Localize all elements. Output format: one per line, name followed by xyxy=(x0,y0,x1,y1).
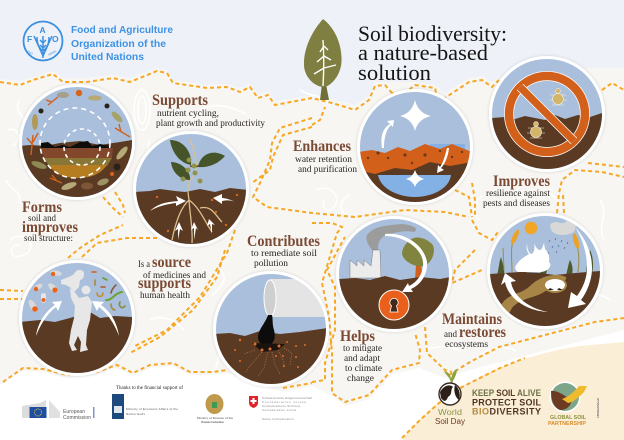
label: source xyxy=(138,254,206,301)
logo: Swiss confederation: Swiss Confederation xyxy=(262,417,294,421)
label: improves: Improves xyxy=(493,173,550,190)
title xyxy=(358,21,507,85)
label: enhances: and purification xyxy=(298,164,357,175)
logo: European Commission: Commission xyxy=(63,415,91,421)
label: forms: soil and xyxy=(28,214,56,224)
logo: Russian ministry xyxy=(197,394,233,424)
FAO logo xyxy=(24,22,62,60)
slogan xyxy=(472,388,542,416)
FAO logo: FIAT xyxy=(26,49,34,56)
logo: Global Soil Partnership: PARTNERSHIP xyxy=(548,421,587,427)
pipe xyxy=(270,279,330,317)
label: source: Is a xyxy=(138,260,151,270)
slogan: PROTECT SOIL xyxy=(472,398,542,408)
FAO name: United Nations xyxy=(71,51,144,63)
slogan: KEEP SOIL ALIVE xyxy=(472,388,541,398)
decorative swirls xyxy=(6,90,610,388)
label: contributes: pollution xyxy=(254,259,288,269)
logo: Swiss confederation xyxy=(249,396,312,421)
background: beige corner xyxy=(402,342,624,440)
slogan: BIODIVERSITY xyxy=(472,406,541,416)
logo: Swiss confederation: Confederaziun svizra xyxy=(262,408,296,412)
label: helps: to climate xyxy=(345,364,382,374)
cycle arrow xyxy=(385,234,427,292)
label: source: source xyxy=(152,254,191,271)
FAO letters: O xyxy=(52,34,59,44)
panel: enhances water xyxy=(357,89,473,205)
worms xyxy=(92,272,125,310)
label: contributes xyxy=(247,233,320,269)
sponsors heading: Thanks to the financial support of xyxy=(116,384,183,391)
human silhouette xyxy=(61,270,92,352)
label: enhances: water retention xyxy=(295,155,352,165)
plant xyxy=(172,139,222,243)
FAO name xyxy=(71,24,173,63)
label: helps: to mitigate xyxy=(343,344,382,354)
smoke xyxy=(366,224,416,250)
panel: helps climate change xyxy=(336,216,452,332)
tree xyxy=(415,266,422,278)
label: improves xyxy=(483,173,550,209)
label: supports: plant growth and productivity xyxy=(156,119,265,129)
arrows xyxy=(381,120,394,148)
label: maintains: Maintains xyxy=(442,311,502,328)
logo: Global Soil Partnership xyxy=(548,382,587,427)
logo: World Soil Day: World xyxy=(438,408,462,417)
FAO letters xyxy=(27,25,59,44)
arrows xyxy=(36,301,62,336)
label: improves: resilience against xyxy=(486,189,550,199)
leaves ring xyxy=(30,90,129,192)
label: helps: and adapt xyxy=(344,354,380,364)
panel: source of medicines xyxy=(19,260,135,376)
logo: Global Soil Partnership: GLOBAL SOIL xyxy=(550,415,586,421)
plants xyxy=(497,250,593,275)
cycle arrows xyxy=(501,273,548,312)
label: enhances xyxy=(293,138,357,175)
label: maintains xyxy=(442,311,506,350)
label: enhances: Enhances xyxy=(293,138,351,155)
label: maintains: ecosystems xyxy=(445,340,488,350)
FAO letters: A xyxy=(40,25,46,35)
print code: CB3611EN/1/12.20 xyxy=(596,398,600,418)
label: maintains: and xyxy=(444,330,457,340)
panel: contributes soil pollution xyxy=(213,271,330,387)
panel: forms soil xyxy=(19,84,135,200)
label: contributes: to remediate soil xyxy=(251,249,317,259)
rabbit xyxy=(515,243,550,272)
logo: World Soil Day xyxy=(435,369,465,426)
title: a nature-based xyxy=(358,40,488,65)
label: supports xyxy=(152,92,265,129)
icon: central leaf xyxy=(304,19,342,100)
panel: supports plant growth xyxy=(133,131,249,247)
title: Soil biodiversity: xyxy=(358,21,507,46)
arrows xyxy=(150,196,186,211)
label: supports: Supports xyxy=(152,92,208,109)
sun xyxy=(525,222,537,234)
label: forms: Forms xyxy=(22,199,62,216)
cloud xyxy=(551,223,575,235)
logo: Russian ministry: Russian Federation xyxy=(201,420,224,424)
logo: Swiss confederation: Confederazione Svizzera xyxy=(262,404,300,408)
panel: improves resilience xyxy=(489,56,605,172)
logo: Swiss confederation: Schweizerische Eidgenossenschaft xyxy=(262,396,312,400)
logo: Russian ministry: Ministry of Finance of the xyxy=(197,416,233,420)
factory xyxy=(350,250,381,278)
label: helps: Helps xyxy=(340,328,375,345)
label: helps: change xyxy=(347,374,374,384)
background: white footer xyxy=(0,330,624,440)
FAO name: Food and Agriculture xyxy=(71,24,173,36)
logo: European Commission xyxy=(22,400,94,421)
label: source: human health xyxy=(140,291,190,301)
logo: Netherlands ministry xyxy=(112,394,178,419)
label: improves: pests and diseases xyxy=(483,199,550,209)
label: forms: soil structure: xyxy=(24,234,73,244)
label: forms xyxy=(22,199,78,244)
label: maintains: restores xyxy=(459,324,506,341)
tunnel xyxy=(502,274,566,313)
label: supports: nutrient cycling, xyxy=(157,109,219,119)
label: contributes: Contributes xyxy=(247,233,320,250)
label: source: of medicines and xyxy=(143,270,206,281)
FAO name: Organization of the xyxy=(71,38,166,50)
logo: World Soil Day: Soil Day xyxy=(435,417,465,426)
water stars xyxy=(400,100,431,131)
logo: Swiss confederation: Confédération suisse xyxy=(262,400,306,404)
logo: Netherlands ministry: Ministry of Economic Affairs of the xyxy=(126,407,178,411)
panel: maintains ecosystems xyxy=(487,213,603,329)
logo: Netherlands ministry: Netherlands xyxy=(126,412,146,416)
icon: bugs xyxy=(527,89,567,138)
contaminants xyxy=(234,339,306,368)
logo: European Commission: European xyxy=(63,409,85,415)
keyhole icon xyxy=(379,290,409,320)
FAO logo: PANIS xyxy=(48,49,57,57)
label: forms: improves xyxy=(22,219,78,236)
oil xyxy=(258,315,275,345)
label: source: supports xyxy=(138,275,191,292)
pills xyxy=(27,269,62,314)
FAO letters: F xyxy=(27,34,32,44)
label: helps xyxy=(340,328,382,384)
title: solution xyxy=(358,60,431,85)
